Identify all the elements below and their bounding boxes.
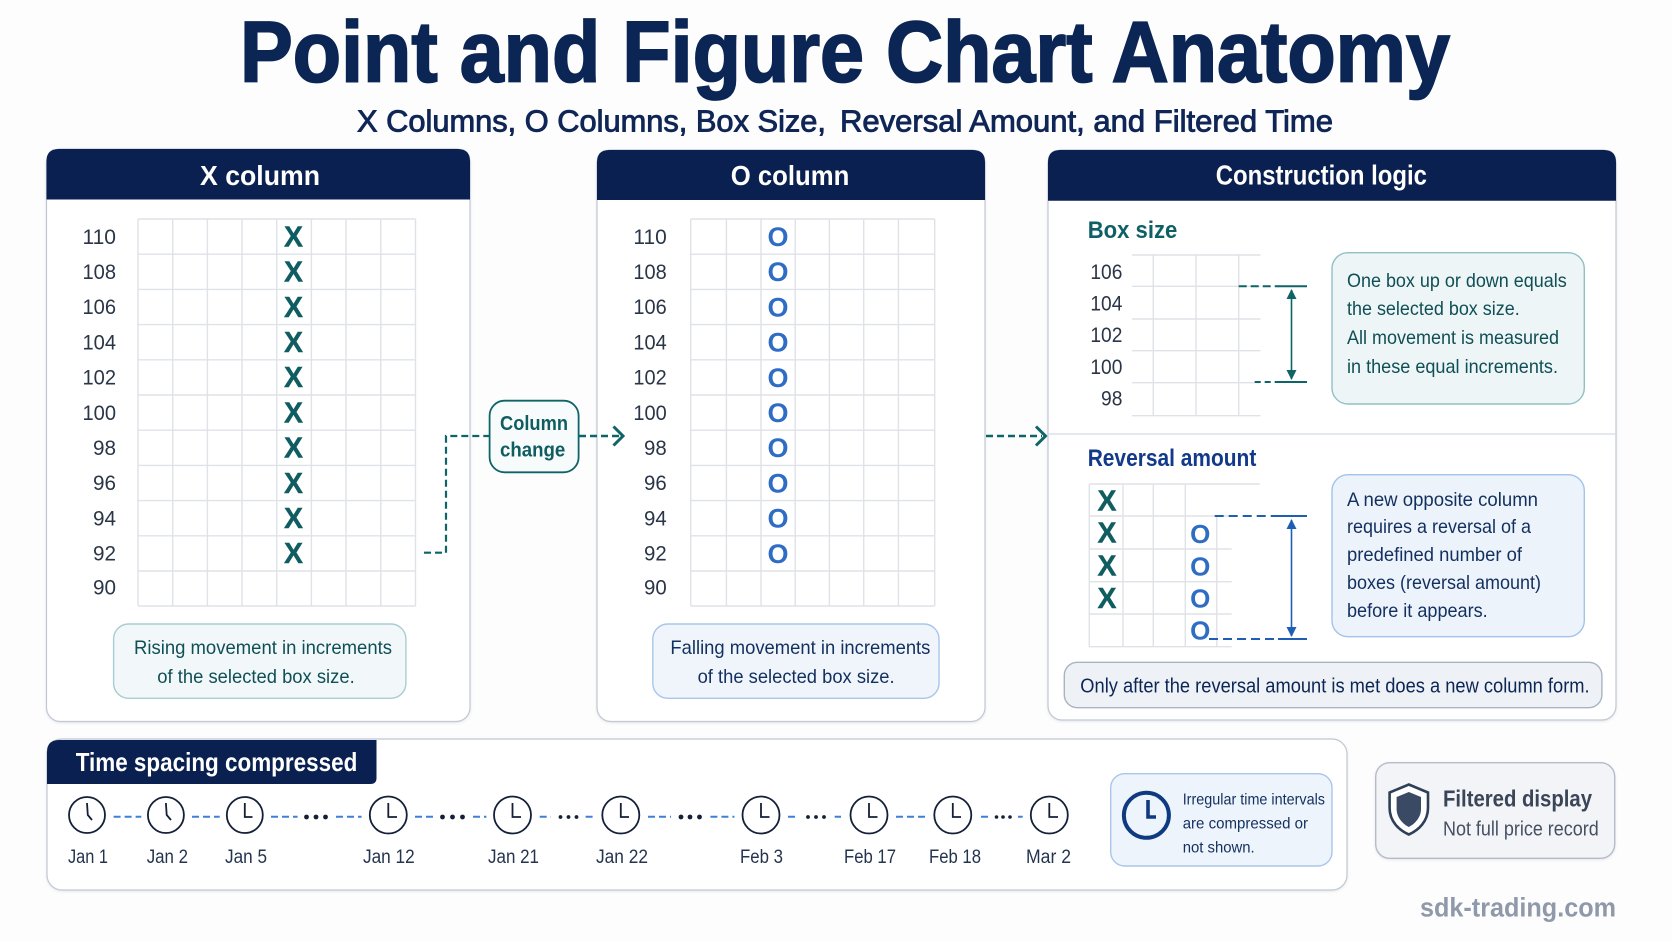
box size callout: One box up or down equals [1347, 270, 1567, 292]
timeline date labels: Feb 17 [844, 847, 896, 868]
watermark: sdk-trading.com [1420, 893, 1616, 923]
reversal callout: boxes (reversal amount) [1347, 572, 1541, 594]
arrow: O column to construction logic [986, 426, 1046, 446]
reversal O marks: O [1190, 616, 1210, 646]
timeline date labels: Feb 3 [740, 847, 783, 868]
X marks column: X [284, 257, 303, 289]
timeline date labels: Jan 12 [363, 847, 415, 868]
X marks column: X [284, 292, 303, 324]
X marks column: X [284, 221, 303, 253]
O column price labels: 96 [644, 472, 667, 495]
O marks column: O [767, 257, 789, 287]
O column price labels: 94 [644, 507, 667, 530]
box size callout [1332, 253, 1584, 404]
panel: filtered display: Filtered display [1443, 786, 1592, 812]
panel: filtered display: Not full price record [1443, 819, 1599, 841]
O column price labels: 102 [633, 367, 667, 390]
X marks column: X [284, 503, 303, 535]
X column price labels: 106 [82, 296, 116, 319]
X column price labels: 92 [93, 543, 116, 566]
time spacing tab: Time spacing compressed [76, 747, 357, 777]
X column callout [114, 624, 406, 698]
O column price labels: 92 [644, 543, 667, 566]
box size price labels [1090, 261, 1123, 410]
X column price labels: 102 [82, 367, 116, 390]
X column price labels: 98 [93, 437, 116, 460]
X column price labels [82, 226, 116, 600]
X marks column: X [284, 433, 303, 465]
O column price labels: 104 [633, 331, 667, 354]
panel: O column [597, 150, 985, 722]
box size heading: Box size [1088, 217, 1177, 244]
timeline clocks [69, 796, 1068, 834]
reversal note: Only after the reversal amount is met does a new column form. [1080, 674, 1590, 698]
O marks column: O [767, 222, 789, 252]
column change label [490, 401, 579, 472]
O column callout: of the selected box size. [698, 666, 895, 688]
X column price labels: 104 [82, 331, 116, 354]
X column price labels: 96 [93, 472, 116, 495]
column change label: Column [500, 413, 568, 435]
timeline date labels: Feb 18 [929, 847, 981, 868]
X column price labels: 108 [82, 261, 116, 284]
reversal X marks: X [1097, 583, 1117, 615]
O column price labels: 98 [644, 437, 667, 460]
box size callout: the selected box size. [1347, 298, 1520, 320]
X column header [46, 149, 470, 200]
box size price labels: 106 [1090, 261, 1122, 284]
O marks column: O [767, 539, 789, 569]
X marks column: X [284, 468, 303, 500]
reversal X marks [1097, 486, 1117, 615]
irregular intervals callout [1111, 774, 1332, 866]
icon: large clock [1124, 793, 1169, 838]
X column callout: of the selected box size. [157, 666, 355, 688]
box size price labels: 100 [1090, 356, 1122, 379]
timeline date labels: Jan 22 [596, 847, 648, 868]
time spacing tab [47, 740, 376, 784]
timeline date labels [68, 847, 1071, 868]
O column header [597, 150, 985, 200]
icon: shield [1390, 784, 1428, 834]
panel: construction logic [1048, 150, 1616, 720]
timeline date labels: Jan 5 [225, 847, 267, 868]
panel: filtered display [1376, 763, 1615, 858]
O column price labels: 90 [644, 577, 667, 600]
box size callout: in these equal increments. [1347, 356, 1558, 378]
O marks column: O [767, 328, 789, 358]
timeline date labels: Jan 21 [488, 847, 539, 868]
X column price labels: 100 [82, 402, 116, 425]
X column callout: Rising movement in increments [134, 637, 392, 659]
reversal measure arrow [1209, 516, 1307, 639]
reversal callout: predefined number of [1347, 544, 1523, 566]
box size callout: All movement is measured [1347, 327, 1559, 349]
O column grid [691, 219, 935, 606]
O marks column [767, 222, 789, 569]
timeline date labels: Jan 2 [147, 847, 188, 868]
irregular intervals callout: Irregular time intervals [1183, 792, 1325, 808]
reversal X marks: X [1097, 550, 1117, 582]
O column price labels: 106 [633, 296, 667, 319]
X column grid [138, 219, 416, 606]
arrow: X column to column change [424, 436, 489, 553]
reversal grid [1089, 484, 1260, 647]
X marks column [284, 221, 303, 570]
X column price labels: 90 [93, 577, 116, 600]
O marks column: O [767, 504, 789, 534]
reversal O marks: O [1190, 519, 1210, 549]
reversal note [1064, 662, 1602, 708]
irregular intervals callout: are compressed or [1183, 816, 1309, 832]
O marks column: O [767, 292, 789, 322]
reversal amount heading: Reversal amount [1088, 445, 1256, 472]
O marks column: O [767, 363, 789, 393]
reversal O marks [1190, 519, 1210, 646]
column change label: change [500, 440, 565, 462]
reversal callout [1332, 475, 1584, 637]
subtitle [357, 104, 1333, 138]
reversal callout: A new opposite column [1347, 489, 1538, 511]
timeline connectors [114, 815, 1023, 819]
irregular intervals callout: not shown. [1183, 840, 1255, 856]
panel: X column [46, 149, 470, 722]
box size price labels: 102 [1090, 324, 1122, 347]
reversal X marks: X [1097, 486, 1117, 518]
X marks column: X [284, 327, 303, 359]
box size grid [1132, 255, 1260, 416]
construction logic header: Construction logic [1216, 160, 1427, 191]
X marks column: X [284, 538, 303, 570]
O marks column: O [767, 433, 789, 463]
O column price labels: 110 [633, 226, 667, 249]
reversal callout: before it appears. [1347, 600, 1488, 622]
reversal X marks: X [1097, 518, 1117, 550]
subtitle: X Columns, O Columns, Box Size, [357, 104, 826, 138]
subtitle: Reversal Amount, and Filtered Time [840, 104, 1333, 138]
reversal O marks: O [1190, 583, 1210, 613]
timeline date labels: Jan 1 [68, 847, 108, 868]
timeline date labels: Mar 2 [1026, 847, 1071, 868]
box size price labels: 104 [1090, 292, 1123, 316]
construction logic header [1048, 150, 1616, 201]
X column price labels: 94 [93, 507, 116, 530]
reversal O marks: O [1190, 551, 1210, 581]
O column price labels: 100 [633, 402, 667, 425]
X column price labels: 110 [82, 226, 116, 249]
O marks column: O [767, 398, 789, 428]
arrow: column change to O column [579, 426, 623, 446]
title: Point and Figure Chart Anatomy [240, 4, 1450, 100]
O column callout [653, 624, 939, 698]
O marks column: O [767, 468, 789, 498]
X marks column: X [284, 362, 303, 394]
X marks column: X [284, 397, 303, 429]
O column price labels: 108 [633, 261, 667, 284]
panel: time spacing compressed [47, 739, 1347, 890]
box size price labels: 98 [1101, 388, 1122, 410]
X column header: X column [200, 160, 320, 191]
reversal callout: requires a reversal of a [1347, 516, 1531, 538]
O column header: O column [731, 160, 849, 191]
O column price labels [633, 226, 667, 600]
O column callout: Falling movement in increments [670, 637, 931, 659]
box size measure arrow [1239, 286, 1307, 382]
